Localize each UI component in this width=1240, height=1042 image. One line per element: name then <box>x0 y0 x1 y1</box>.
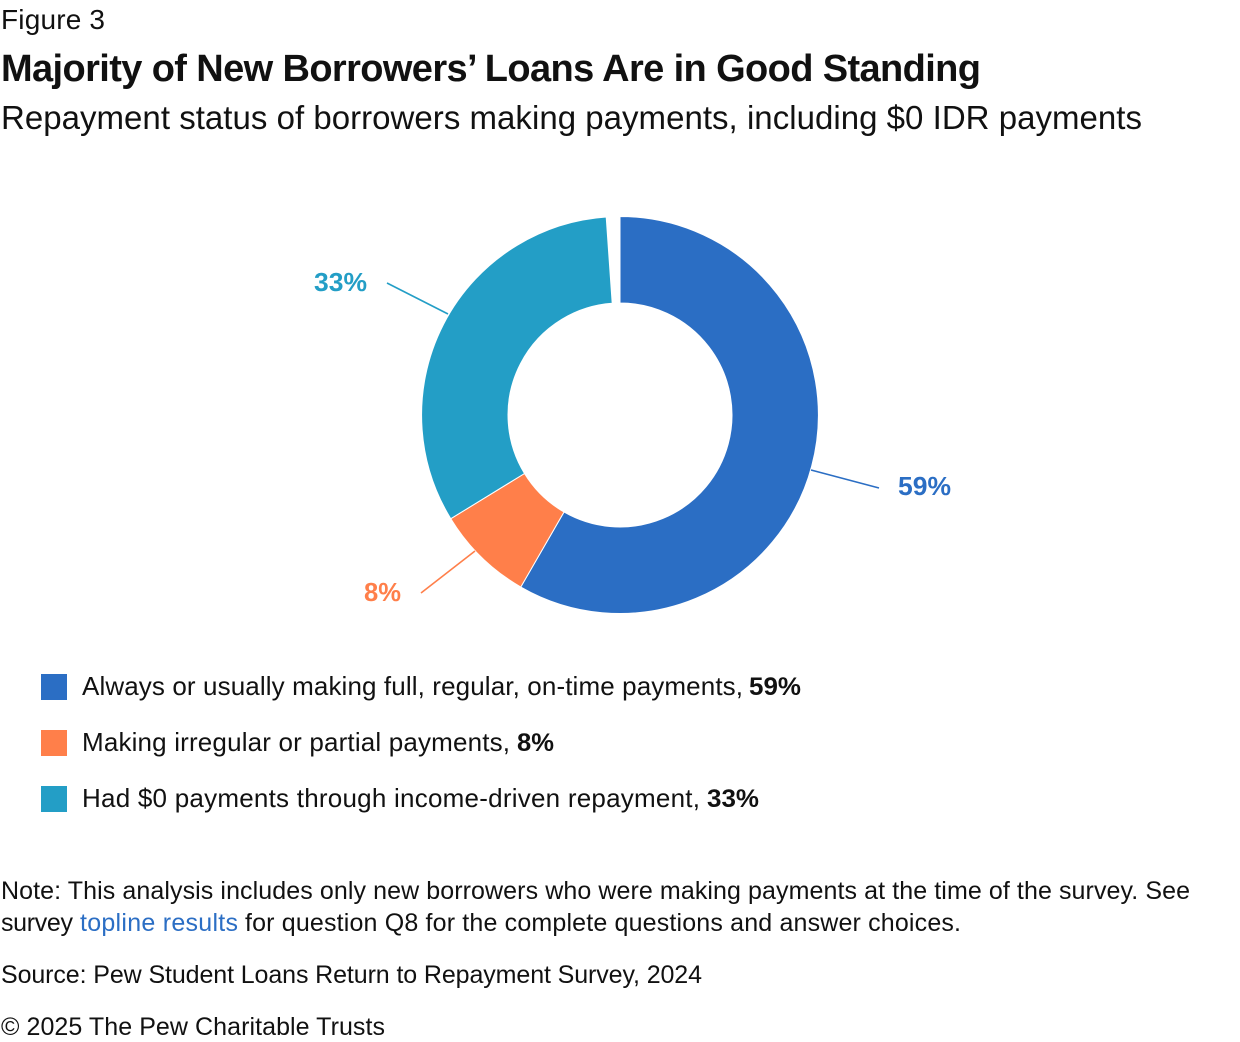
callout: 33%: 33% <box>314 267 367 297</box>
note: survey <box>1 909 74 937</box>
segment: always or usually on time 59% <box>521 216 818 613</box>
subtitle: Repayment status of borrowers making payments, including $0 IDR payments <box>1 99 1142 136</box>
legend item: on time: 59% <box>749 673 801 701</box>
note: topline results <box>80 909 238 937</box>
callout: 33% <box>314 267 448 314</box>
copyright: © 2025 The Pew Charitable Trusts <box>1 1013 385 1041</box>
legend item: irregular: 8% <box>517 729 554 757</box>
callout: 59% <box>811 470 951 501</box>
segment: $0 IDR payments 33% <box>422 217 612 519</box>
note: Note: This analysis includes only new borrowers who were making payments at the time of the survey. See <box>1 877 1190 905</box>
source: Source: Pew Student Loans Return to Repayment Survey, 2024 <box>1 961 702 989</box>
callout: 8%: 8% <box>364 577 401 607</box>
legend item: irregular: Making irregular or partial payments, <box>82 727 510 757</box>
segment: irregular or partial 8% <box>451 474 564 587</box>
callout: 8% <box>364 551 475 607</box>
note: for question Q8 for the complete questions and answer choices. <box>245 909 961 937</box>
callout: 59%: 59% <box>898 471 951 501</box>
title: Majority of New Borrowers’ Loans Are in Good Standing <box>1 48 981 90</box>
legend item: $0 IDR: Had $0 payments through income-driven repayment, <box>82 783 700 813</box>
figure label: Figure 3 <box>1 4 105 35</box>
donut chart <box>422 216 818 613</box>
legend <box>41 671 801 813</box>
note <box>1 877 1190 937</box>
legend item: $0 IDR: 33% <box>707 785 759 813</box>
legend item: on time: Always or usually making full, regular, on-time payments, <box>82 671 743 701</box>
